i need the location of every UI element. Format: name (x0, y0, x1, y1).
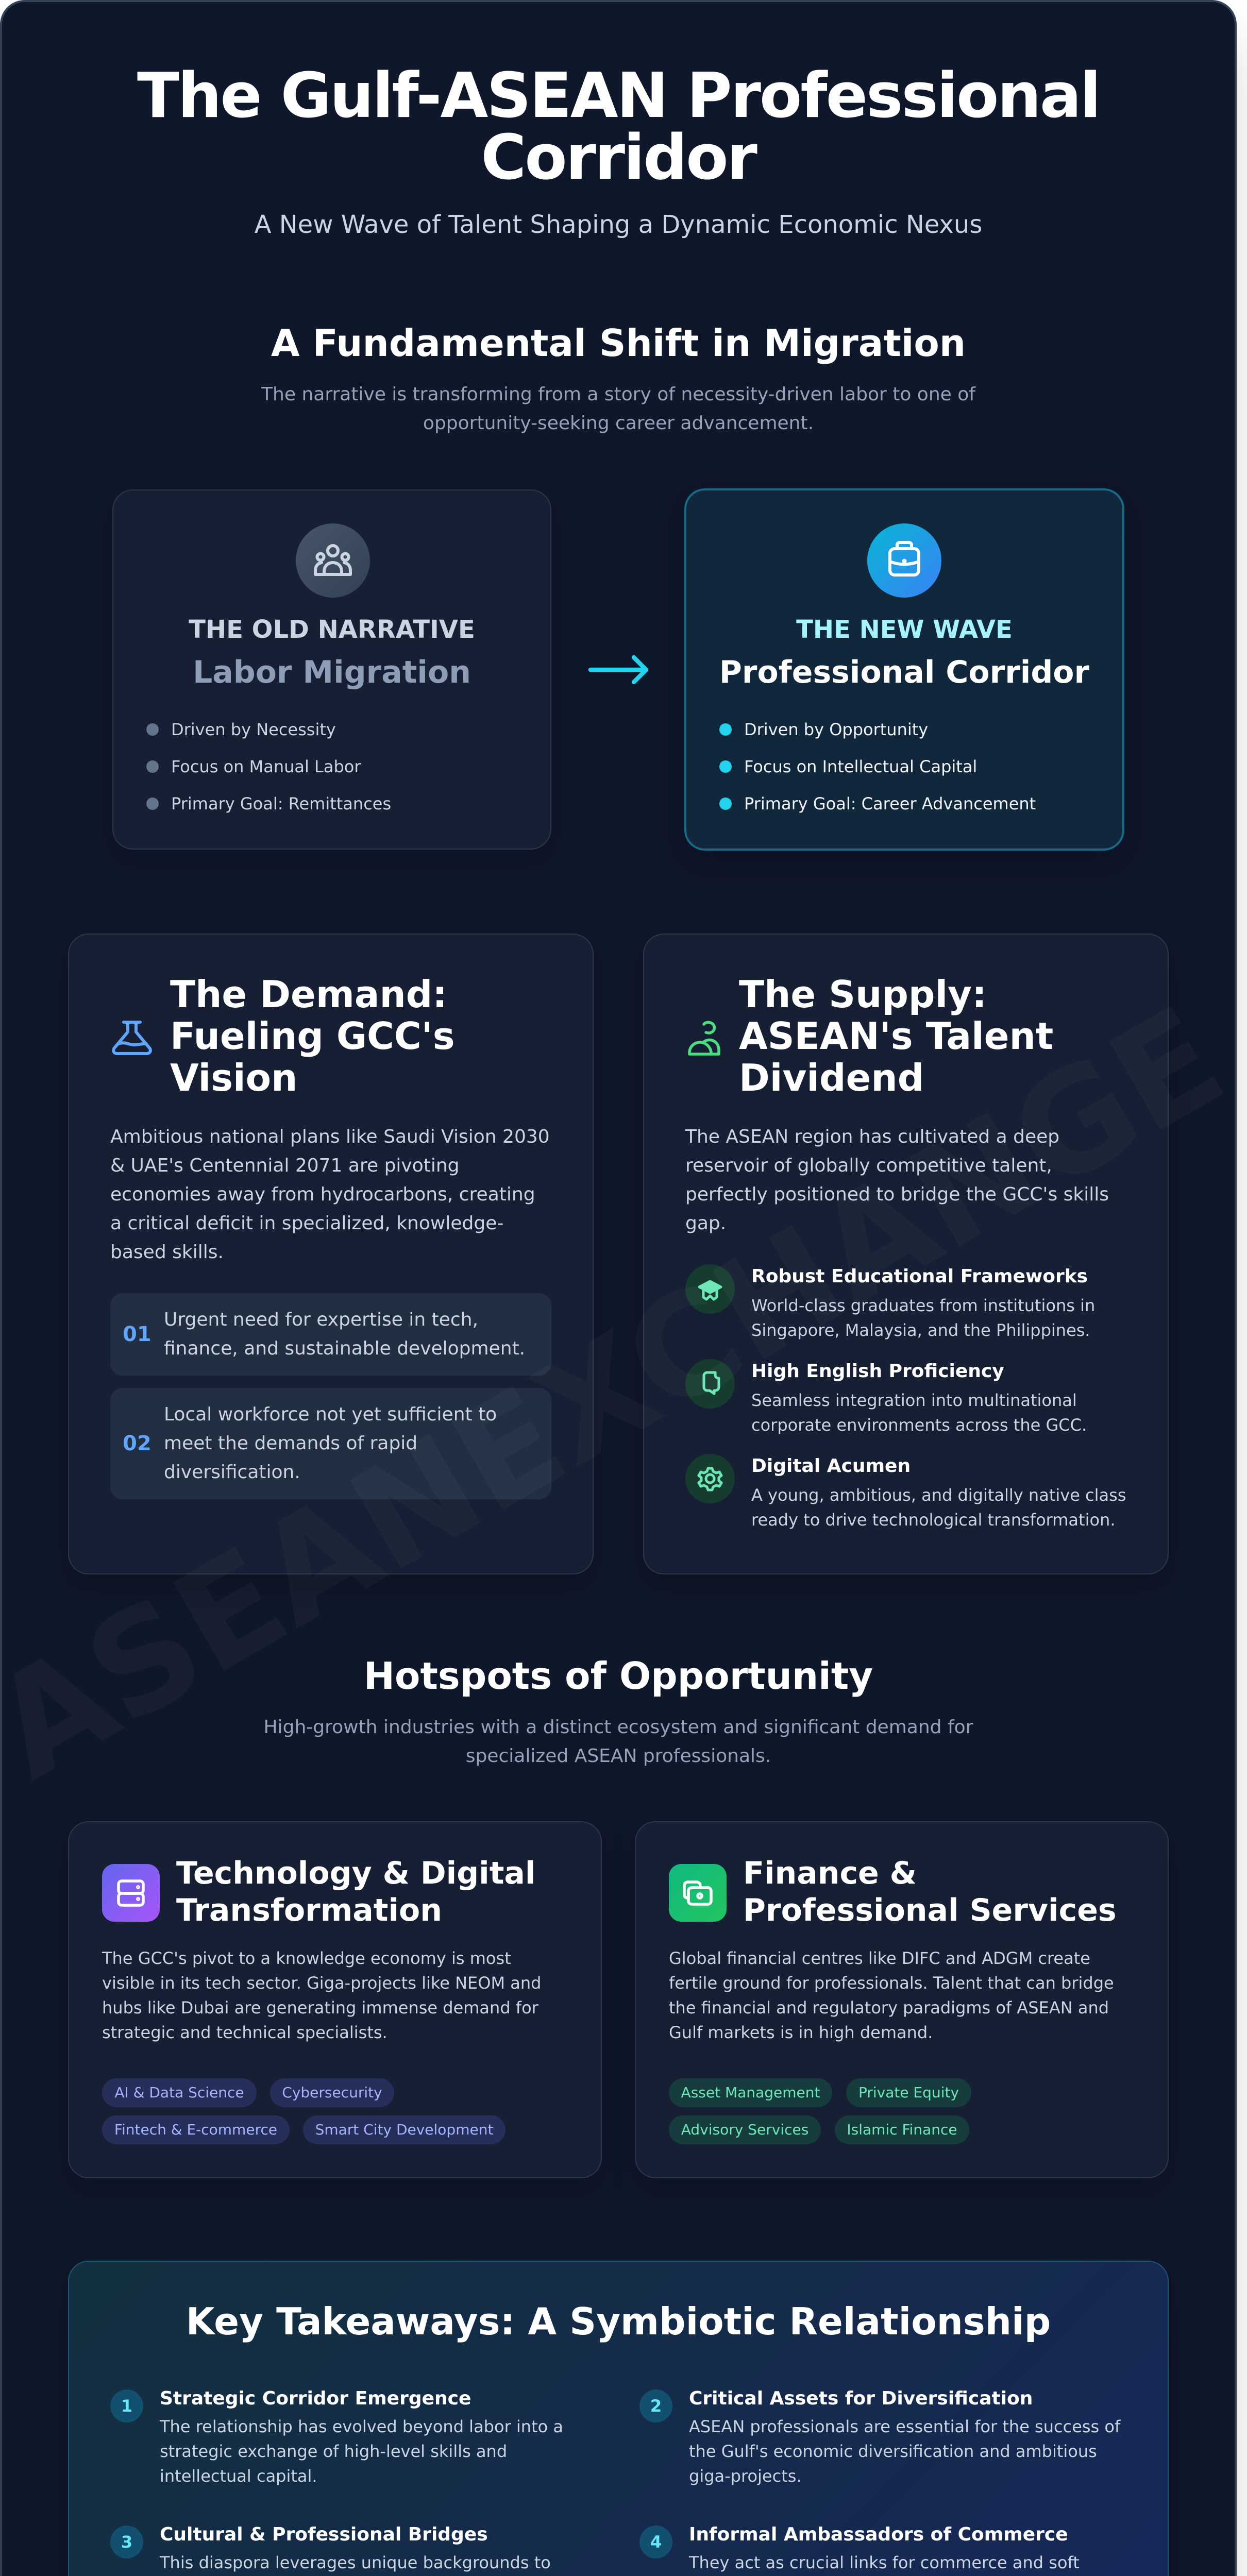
takeaway 2 (639, 2388, 1121, 2486)
icon: speech bubble (685, 1359, 735, 1409)
callout: point 01 (110, 1293, 551, 1376)
panel: the supply (643, 934, 1169, 1574)
text: supply description: The ASEAN region has cultivated a deep (685, 1126, 1059, 1147)
takeaway 4 (639, 2524, 1080, 2572)
description: World-class graduates from institutions in (751, 1296, 1095, 1315)
list: new wave traits: Primary Goal: Career Advancement (744, 794, 1036, 814)
text: demand description: Ambitious national plans like Saudi Vision 2030 (110, 1126, 550, 1147)
tags: finance: Advisory Services (681, 2121, 808, 2138)
text: point 01 (164, 1309, 525, 1359)
text: demand description: a critical deficit in specialized, knowledge- (110, 1213, 503, 1234)
tags: technology: Fintech & E-commerce (114, 2121, 277, 2138)
text: shift intro: opportunity-seeking career advancement. (423, 413, 814, 434)
tags: finance: Islamic Finance (847, 2121, 957, 2138)
heading: the supply (739, 973, 1053, 1099)
heading: the demand: Vision (170, 1056, 297, 1099)
number badge 2: 2 (650, 2396, 662, 2416)
icon: server (102, 1864, 160, 1922)
tags: finance (669, 2078, 971, 2144)
description: The relationship has evolved beyond labor into a (160, 2417, 563, 2436)
title: Informal Ambassadors of Commerce (689, 2524, 1068, 2545)
description: Singapore, Malaysia, and the Philippines. (751, 1320, 1090, 1340)
list item: digital acumen (685, 1454, 1126, 1530)
heading: the supply: Dividend (739, 1056, 924, 1099)
heading: technology (176, 1855, 535, 1928)
icon: gear (685, 1454, 735, 1503)
icon: cash (669, 1864, 727, 1922)
text: technology description: The GCC's pivot to a knowledge economy is most (102, 1948, 511, 1968)
text: finance description: Gulf markets is in high demand. (669, 2023, 933, 2042)
text: hotspots intro: High-growth industries with a distinct ecosystem and significant demand for (264, 1717, 973, 1738)
text: shift intro (261, 384, 976, 434)
list item: english proficiency (685, 1359, 1087, 1435)
panel: new wave (684, 488, 1124, 851)
text: demand description: based skills. (110, 1242, 224, 1263)
text: technology description: strategic and technical specialists. (102, 2023, 387, 2042)
icon: flask (112, 1021, 152, 1055)
number badge 4: 4 (650, 2532, 662, 2552)
tags: finance: Asset Management (681, 2084, 820, 2101)
title: The Gulf-ASEAN Professional (137, 60, 1100, 132)
icon: people (296, 523, 370, 598)
panel: key takeaways (68, 2261, 1169, 2576)
icon: talent person (688, 1021, 720, 1056)
takeaway 3 (110, 2524, 551, 2572)
number badge 1: 1 (121, 2396, 132, 2416)
heading: labor migration: Labor Migration (193, 654, 471, 690)
title (137, 60, 1100, 194)
description: corporate environments across the GCC. (751, 1415, 1087, 1435)
panel: technology (68, 1821, 602, 2178)
tags: technology: AI & Data Science (114, 2084, 244, 2101)
icon: briefcase (867, 523, 941, 598)
heading: finance: Professional Services (743, 1892, 1117, 1928)
title: Strategic Corridor Emergence (160, 2388, 471, 2409)
title: Digital Acumen (751, 1455, 911, 1477)
heading: the supply: ASEAN's Talent (739, 1014, 1053, 1058)
description: intellectual capital. (160, 2466, 317, 2486)
takeaway 1 (110, 2388, 563, 2486)
icon: graduation cap (685, 1264, 735, 1314)
heading: technology: Technology & Digital (176, 1855, 535, 1891)
description (751, 1296, 1095, 1340)
text: hotspots intro (264, 1717, 973, 1767)
arrow: old to new (588, 655, 648, 684)
number badge 1 (110, 2389, 143, 2422)
text: demand description (110, 1126, 550, 1263)
callout: point 02 (110, 1388, 551, 1499)
text: point 02 (164, 1404, 497, 1483)
text: technology description: visible in its tech sector. Giga-projects like NEOM and (102, 1973, 541, 1993)
text: technology description: hubs like Dubai are generating immense demand for (102, 1998, 538, 2018)
text: demand description: & UAE's Centennial 2071 are pivoting (110, 1155, 460, 1176)
description: ready to drive technological transformation. (751, 1510, 1115, 1530)
label: the new wave: THE NEW WAVE (796, 615, 1013, 644)
description (160, 2417, 563, 2486)
title: Cultural & Professional Bridges (160, 2524, 488, 2545)
heading: finance (743, 1855, 1117, 1928)
title: High English Proficiency (751, 1361, 1004, 1382)
text: finance description: fertile ground for professionals. Talent that can bridge (669, 1973, 1114, 1993)
text: finance description: the financial and regulatory paradigms of ASEAN and (669, 1998, 1109, 2018)
heading: the demand (170, 973, 455, 1099)
number badge 3 (110, 2526, 143, 2558)
panel: finance (635, 1821, 1169, 2178)
heading: technology: Transformation (176, 1892, 442, 1928)
text: finance description (669, 1948, 1114, 2042)
number 02: 02 (123, 1432, 151, 1455)
heading: hotspots: Hotspots of Opportunity (364, 1654, 873, 1698)
heading: key takeaways: Key Takeaways: A Symbiotic Relationship (186, 2300, 1051, 2343)
label: the old narrative: THE OLD NARRATIVE (189, 615, 475, 644)
list: new wave traits: Driven by Opportunity (744, 720, 928, 739)
tags: technology: Cybersecurity (282, 2084, 382, 2101)
text: supply description: gap. (685, 1213, 726, 1234)
number badge 4 (639, 2526, 672, 2558)
text: point 02: Local workforce not yet sufficient to (164, 1404, 497, 1425)
text: supply description: reservoir of globally competitive talent, (685, 1155, 1052, 1176)
tags: technology: Smart City Development (315, 2121, 493, 2138)
title: Robust Educational Frameworks (751, 1266, 1088, 1287)
heading: the supply: The Supply: (739, 973, 987, 1016)
text: finance description: Global financial centres like DIFC and ADGM create (669, 1948, 1090, 1968)
description: giga-projects. (689, 2466, 802, 2486)
description (751, 1391, 1087, 1435)
list: new wave traits (719, 720, 1036, 814)
number 01: 01 (123, 1323, 151, 1346)
heading: fundamental shift: A Fundamental Shift in Migration (271, 321, 966, 365)
text: hotspots intro: specialized ASEAN professionals. (466, 1745, 771, 1767)
text: shift intro: The narrative is transforming from a story of necessity-driven labor to one of (261, 384, 975, 405)
panel: the demand (68, 934, 594, 1574)
title: Critical Assets for Diversification (689, 2388, 1033, 2409)
tags: finance: Private Equity (858, 2084, 959, 2101)
list: new wave traits: Focus on Intellectual Capital (744, 757, 977, 776)
description: ASEAN professionals are essential for the success of (689, 2417, 1120, 2436)
description: A young, ambitious, and digitally native class (751, 1485, 1126, 1505)
heading: the demand: Fueling GCC's (170, 1014, 455, 1058)
title: Corridor (481, 122, 756, 194)
number badge 3: 3 (121, 2532, 132, 2552)
description (751, 1485, 1126, 1530)
list: old narrative traits: Primary Goal: Remittances (171, 794, 391, 814)
text: technology description (102, 1948, 541, 2042)
heading: professional corridor: Professional Corridor (719, 654, 1089, 690)
tags: technology (102, 2078, 505, 2144)
text: supply description (685, 1126, 1109, 1234)
description: strategic exchange of high-level skills and (160, 2442, 507, 2461)
description: Seamless integration into multinational (751, 1391, 1077, 1410)
text: demand description: economies away from hydrocarbons, creating (110, 1184, 535, 1205)
list: old narrative traits (146, 720, 391, 814)
heading: finance: Finance & (743, 1855, 917, 1891)
text: point 02: meet the demands of rapid (164, 1433, 417, 1454)
description: the Gulf's economic diversification and ambitious (689, 2442, 1097, 2461)
text: point 01: Urgent need for expertise in tech, (164, 1309, 478, 1330)
description: This diaspora leverages unique backgrounds to (160, 2553, 551, 2572)
text: point 01: finance, and sustainable development. (164, 1338, 525, 1359)
list item: educational frameworks (685, 1264, 1095, 1340)
panel: old narrative (112, 489, 551, 850)
list: old narrative traits: Driven by Necessity (171, 720, 336, 739)
list: old narrative traits: Focus on Manual Labor (171, 757, 361, 776)
description: They act as crucial links for commerce and soft (689, 2553, 1080, 2572)
text: point 02: diversification. (164, 1462, 300, 1483)
text: supply description: perfectly positioned to bridge the GCC's skills (685, 1184, 1109, 1205)
subtitle: A New Wave of Talent Shaping a Dynamic Economic Nexus (255, 210, 982, 239)
description (689, 2417, 1121, 2486)
heading: the demand: The Demand: (170, 973, 447, 1016)
number badge 2 (639, 2389, 672, 2422)
